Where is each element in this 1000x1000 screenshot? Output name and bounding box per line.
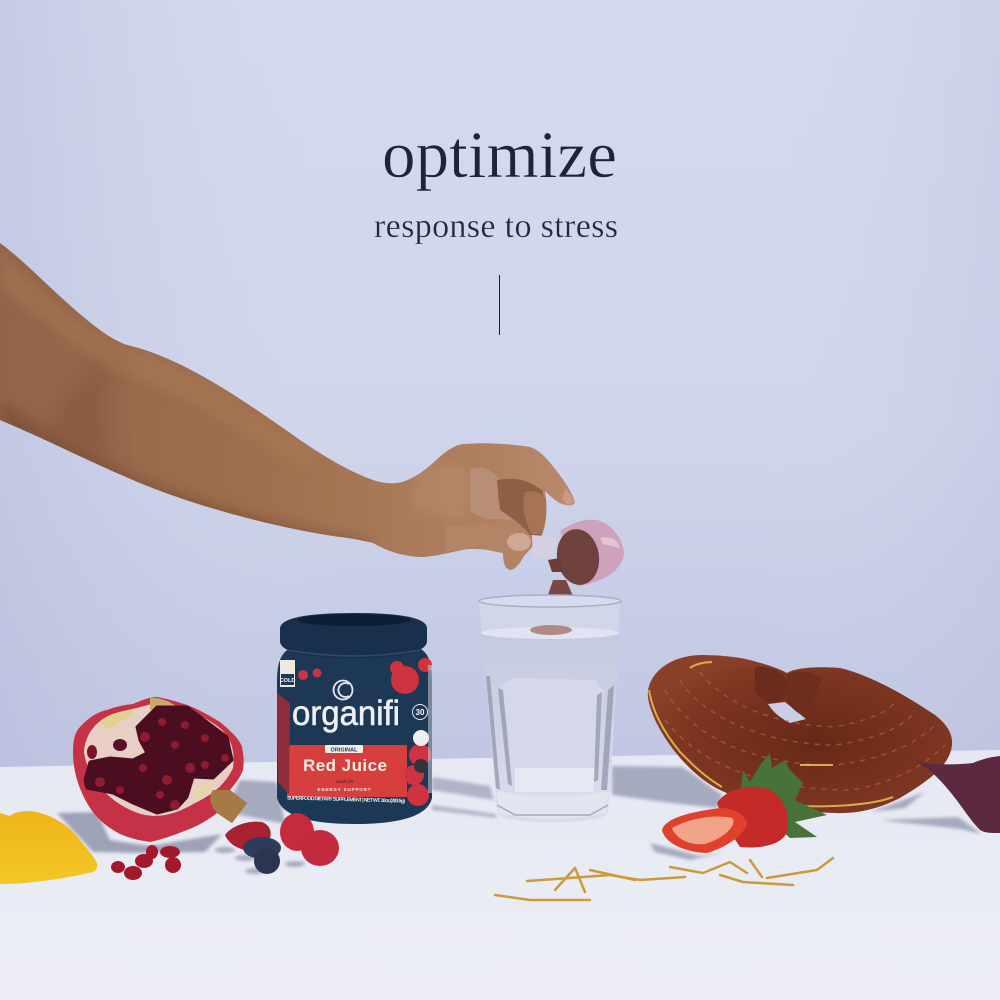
finger shadows [497, 479, 545, 535]
thumb nail [507, 533, 531, 551]
reishi yellow rim [649, 662, 893, 806]
pomegranate yellow pith [100, 710, 135, 730]
product jar: Organifi Red Juice: 30 [416, 708, 425, 717]
powder floating on water [530, 625, 572, 635]
thumb [445, 525, 533, 552]
jar tagline: made for [336, 780, 354, 785]
pomegranate seed highlights [95, 718, 229, 810]
pomegranate seeds [111, 845, 181, 880]
glass facet panel [500, 678, 604, 768]
jar cold tag [280, 660, 295, 687]
measuring scoop with powder [532, 520, 624, 607]
product jar: Organifi Red Juice [277, 613, 432, 824]
jar brand name: organifi [292, 694, 400, 733]
jar original tag [325, 745, 363, 753]
raspberries and blueberries [225, 813, 339, 874]
strawberry whole [717, 753, 827, 847]
jar small text: ENERGY SUPPORT [318, 787, 371, 792]
jar cold tag: COLD [280, 678, 295, 684]
reishi growth rings [665, 672, 945, 790]
lemon [0, 811, 97, 884]
background wall [0, 0, 1000, 770]
strawberry half [662, 808, 747, 853]
palm inside [470, 468, 520, 520]
glass side facets [486, 676, 614, 790]
title: optimize [382, 118, 617, 192]
reishi notch [768, 702, 806, 723]
jar label band [287, 745, 407, 797]
vertical divider line [499, 275, 500, 335]
jar berries [277, 658, 432, 806]
arm and hand [0, 243, 575, 570]
beet [917, 756, 1000, 833]
glass of water [479, 595, 621, 822]
table shadows [57, 766, 982, 874]
subtitle: response to stress [374, 208, 618, 245]
nail of index finger [562, 488, 575, 505]
product jar: Organifi Red Juice: ORIGINAL [331, 748, 358, 754]
jar badges [412, 704, 428, 720]
pomegranate [73, 697, 247, 842]
jar logo [334, 680, 352, 700]
glass base [497, 792, 608, 819]
jar net weight line: SUPERFOOD DIETARY SUPPLEMENT | NET WT. 10oz (283.5g) [287, 795, 405, 805]
jar right label edge [428, 665, 432, 793]
pomegranate seed mass [85, 707, 232, 813]
pomegranate stem [210, 790, 247, 823]
pomegranate flesh [84, 702, 234, 816]
reishi mushroom [648, 655, 952, 813]
jar product name: Red Juice [303, 756, 387, 775]
table surface [0, 750, 1000, 1000]
dried cordyceps strands [495, 858, 833, 900]
reishi inner curls [755, 667, 789, 703]
